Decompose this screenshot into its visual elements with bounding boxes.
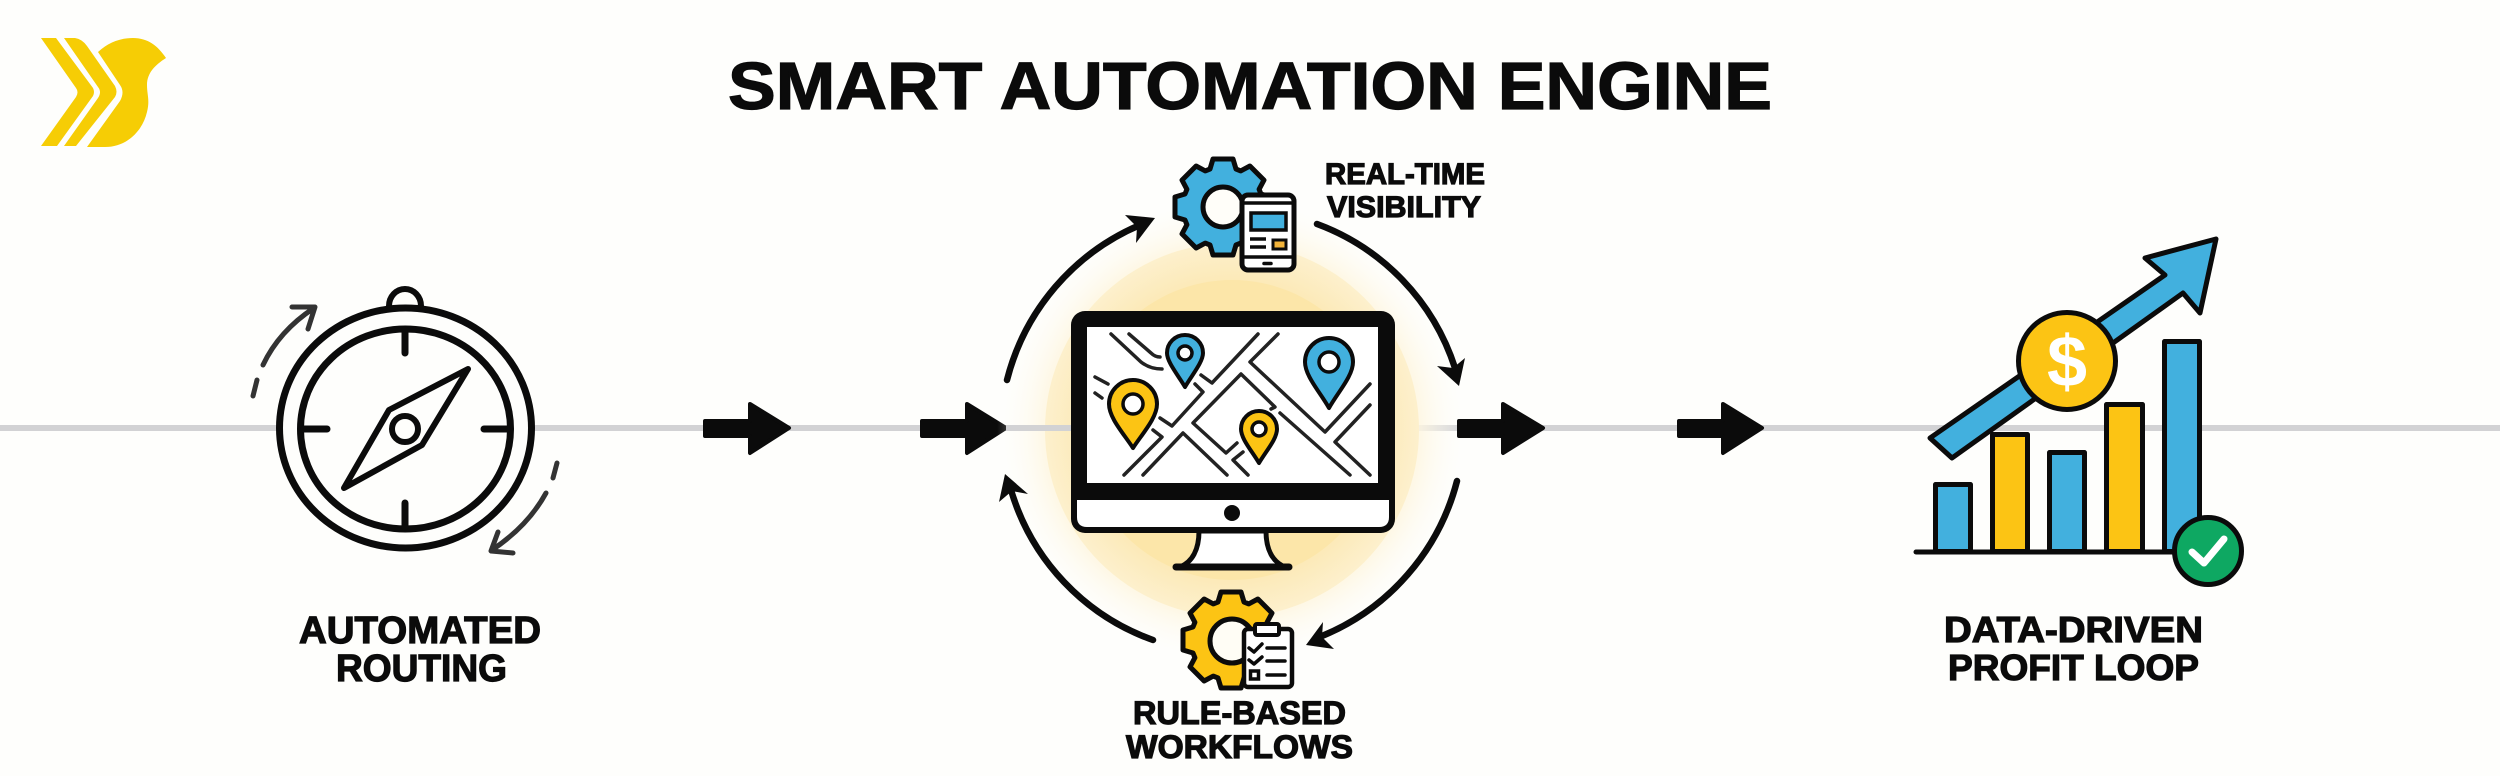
arrow: flow 2	[922, 404, 1006, 453]
title: SMART AUTOMATION ENGINE	[728, 49, 1772, 124]
label: rule-based workflows	[1126, 695, 1353, 765]
icon: yellow gear with clipboard	[1183, 592, 1292, 688]
map roads	[1095, 334, 1370, 475]
arrow: flow 3	[1459, 404, 1543, 453]
label: real-time visibility: REAL-TIME	[1325, 158, 1485, 191]
icon: blue gear with tablet	[1175, 159, 1294, 270]
timeline line	[0, 425, 2500, 431]
cycle arrow: top left	[1007, 215, 1155, 380]
dollar coin	[2018, 312, 2116, 410]
label: automated routing: ROUTING	[336, 648, 507, 690]
label: real-time visibility	[1325, 158, 1485, 224]
clipboard	[1244, 624, 1292, 687]
cycle arrow: bottom right	[1306, 481, 1457, 649]
icon: compass	[253, 289, 557, 553]
label: data-driven profit loop: DATA-DRIVEN	[1944, 609, 2203, 650]
tablet	[1242, 195, 1294, 270]
blue gear	[1175, 159, 1271, 255]
arrow: flow 4	[1679, 404, 1762, 453]
dollar coin: $	[2047, 322, 2087, 402]
cycle arrow: top right	[1317, 224, 1465, 386]
map pin: blue small	[1167, 335, 1203, 387]
glow behind monitor	[997, 195, 1467, 665]
check badge	[2174, 518, 2242, 584]
arrow: flow 1	[705, 404, 789, 453]
monitor body	[1071, 311, 1395, 533]
label: automated routing: AUTOMATED	[299, 610, 541, 652]
map pin: yellow small	[1241, 411, 1277, 463]
label: real-time visibility: VISIBILITY	[1327, 191, 1481, 224]
label: rule-based workflows: WORKFLOWS	[1126, 729, 1353, 765]
map pin: blue large	[1305, 338, 1353, 408]
icon: profit chart	[1916, 239, 2242, 584]
line across glow	[1006, 425, 1071, 431]
label: data-driven profit loop	[1944, 609, 2203, 688]
monitor stand	[1176, 531, 1289, 567]
yellow gear	[1183, 592, 1279, 688]
icon: monitor with map	[1071, 311, 1395, 567]
trend arrow	[1930, 239, 2216, 458]
label: data-driven profit loop: PROFIT LOOP	[1948, 647, 2199, 688]
label: automated routing	[299, 610, 541, 690]
logo	[41, 38, 166, 147]
label: rule-based workflows: RULE-BASED	[1133, 695, 1346, 731]
map pin: yellow large	[1109, 380, 1157, 448]
bar chart	[1916, 342, 2200, 552]
cycle arrow: bottom left	[999, 474, 1153, 640]
